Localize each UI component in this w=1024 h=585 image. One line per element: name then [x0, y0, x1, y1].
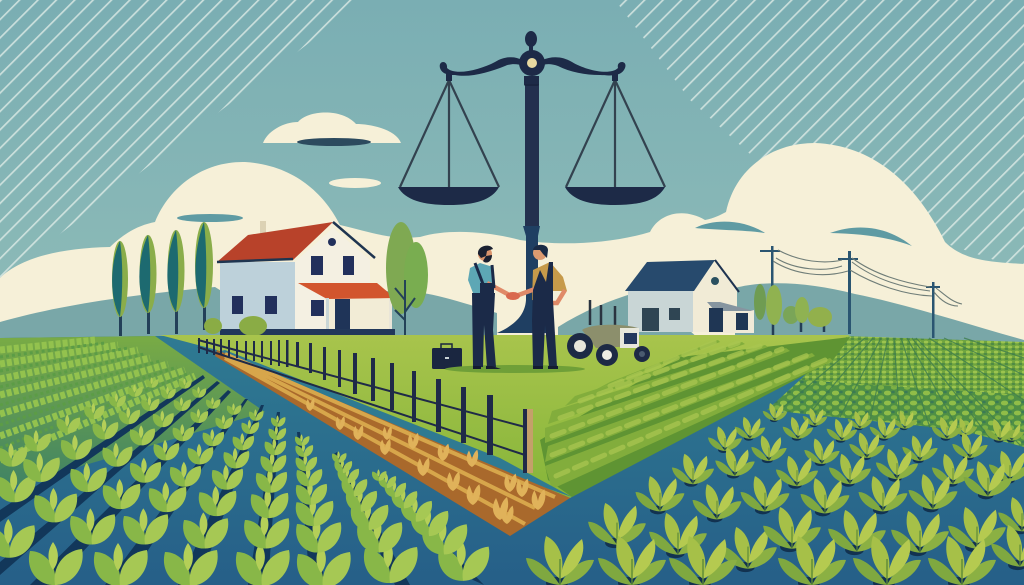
roof [625, 260, 715, 291]
gable wall [295, 228, 370, 334]
left chains [400, 80, 499, 187]
arm [487, 283, 513, 297]
arms [513, 289, 565, 303]
beam [440, 57, 625, 76]
porch roof [298, 283, 395, 299]
right farmer [513, 245, 567, 369]
boots [533, 366, 558, 369]
cloud shadows [177, 214, 912, 246]
post collar [524, 80, 539, 86]
cloud bank on horizon [0, 143, 1024, 345]
fence [198, 338, 533, 473]
wall base [220, 329, 395, 335]
round tree [386, 222, 428, 335]
gable wall [693, 263, 737, 332]
briefcase [432, 344, 462, 369]
head [533, 246, 547, 260]
left farmer [468, 246, 513, 369]
door and window [642, 308, 680, 331]
knob [525, 31, 537, 47]
field base: blue soil [0, 336, 1024, 585]
lower post [497, 226, 555, 333]
far left field [0, 336, 265, 490]
bushes [204, 316, 267, 336]
left field crop rows [0, 377, 489, 585]
right field seedlings [526, 403, 1024, 585]
end post [523, 409, 533, 473]
boots [473, 366, 501, 369]
green meadow [160, 335, 850, 498]
handshake [506, 292, 520, 300]
brown failing crop strip [215, 350, 570, 536]
cypress trees [112, 222, 213, 336]
tractor [567, 300, 650, 366]
sky background [0, 0, 1024, 345]
centre crop rows [540, 337, 850, 497]
hatching: top right sky [615, 0, 1024, 270]
right farm trees [754, 284, 832, 335]
hills [0, 283, 1024, 345]
far right green field [767, 336, 1024, 447]
side wall [220, 262, 296, 334]
post [525, 82, 539, 227]
left pan [398, 187, 499, 205]
annex [710, 310, 754, 333]
scale of justice [398, 31, 665, 333]
right farmhouse [625, 260, 754, 333]
roof edge [217, 222, 375, 262]
left farmhouse [217, 221, 395, 335]
pivot [519, 50, 545, 76]
shirt [532, 262, 567, 303]
left field furrow shadows [0, 375, 484, 585]
overalls [532, 262, 557, 367]
soil edge strip [217, 350, 572, 497]
head [478, 247, 492, 261]
small cloud: upper [263, 112, 401, 146]
utility poles and wires [760, 246, 962, 338]
ground shadow under farmers [445, 365, 585, 373]
straps [475, 263, 494, 288]
right chains [566, 80, 665, 187]
overalls [472, 293, 496, 367]
right pan [565, 187, 665, 205]
side wall [628, 290, 694, 332]
windows [232, 238, 354, 314]
porch [327, 298, 389, 335]
small cloud: middle [329, 178, 381, 188]
shirt [468, 263, 495, 293]
hatching: top left sky [0, 0, 365, 280]
main roof [217, 222, 333, 262]
chimney [260, 221, 266, 241]
porch door [335, 299, 350, 335]
